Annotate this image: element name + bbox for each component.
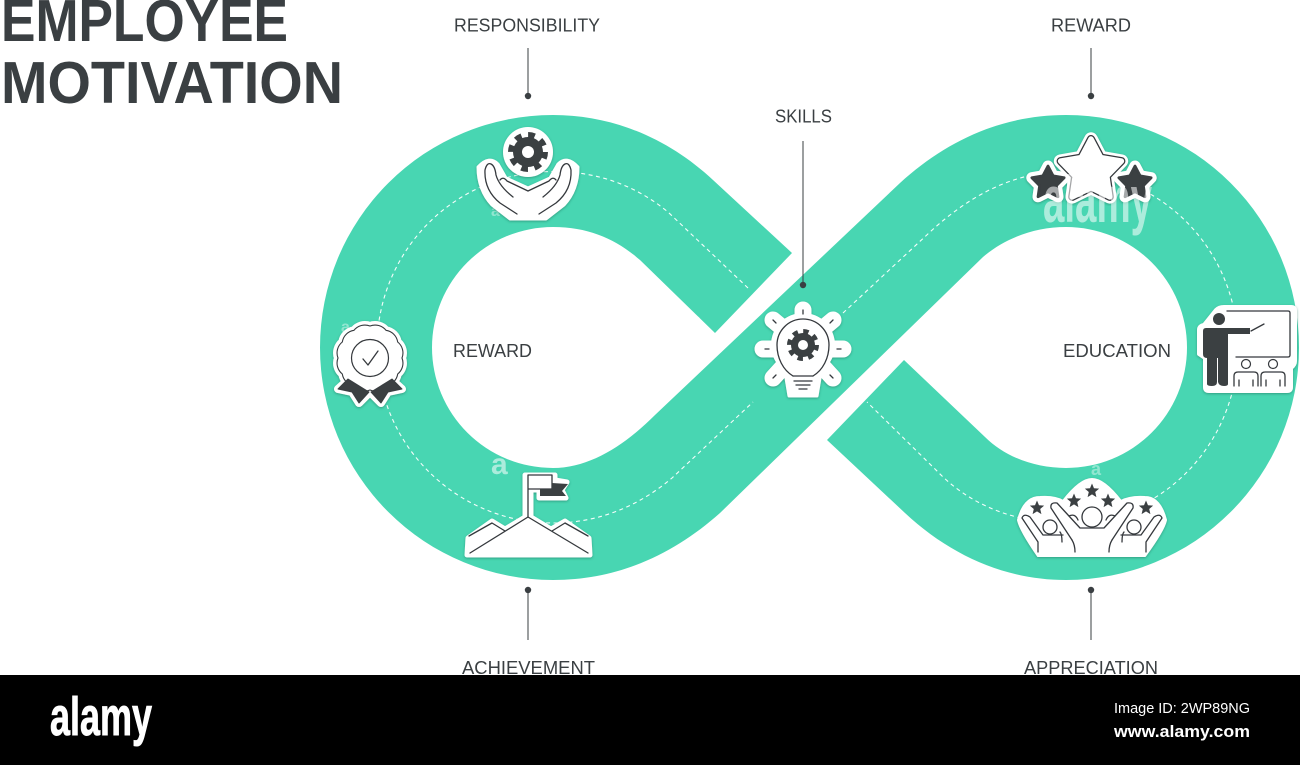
icon: rosette badge [337, 325, 403, 403]
icon: flag on mountain [467, 475, 590, 555]
label: appreciation with leader: APPRECIATION [1024, 658, 1158, 678]
title [1, 0, 343, 116]
footer image id: Image ID: 2WP89NG [1114, 700, 1250, 717]
icon: teacher at board [1199, 307, 1295, 391]
label: reward centre left: REWARD [453, 341, 532, 361]
icon: lightbulb with gear [763, 310, 843, 396]
watermark marks [341, 203, 1102, 481]
label: skills with leader [775, 106, 832, 288]
footer bar [0, 675, 1300, 765]
watermark marks: a [491, 448, 508, 481]
icon: appreciation group with stars [1018, 479, 1166, 556]
label: skills with leader: SKILLS [775, 106, 832, 126]
icon: hands holding gear [478, 127, 578, 219]
label: responsibility with leader [454, 16, 600, 99]
label: reward top with leader: REWARD [1051, 16, 1131, 36]
footer logo: alamy [50, 687, 152, 747]
watermark: alamy: alamy [1043, 162, 1152, 236]
label: achievement with leader: ACHIEVEMENT [462, 658, 595, 678]
dashed path [377, 172, 1238, 523]
watermark marks: a [1091, 459, 1102, 479]
watermark marks: a [341, 319, 350, 336]
label: education: EDUCATION [1063, 341, 1171, 361]
watermark marks: a [693, 311, 701, 327]
label: reward top with leader [1051, 16, 1131, 99]
label: responsibility with leader: RESPONSIBILITY [454, 16, 600, 36]
watermark marks: a [491, 203, 500, 220]
footer url: www.alamy.com [1113, 722, 1250, 741]
title: MOTIVATION [1, 50, 343, 116]
infinity band [320, 115, 1299, 580]
icon: three stars [1032, 139, 1151, 197]
label: achievement with leader [462, 587, 595, 678]
label: appreciation with leader [1024, 587, 1158, 678]
